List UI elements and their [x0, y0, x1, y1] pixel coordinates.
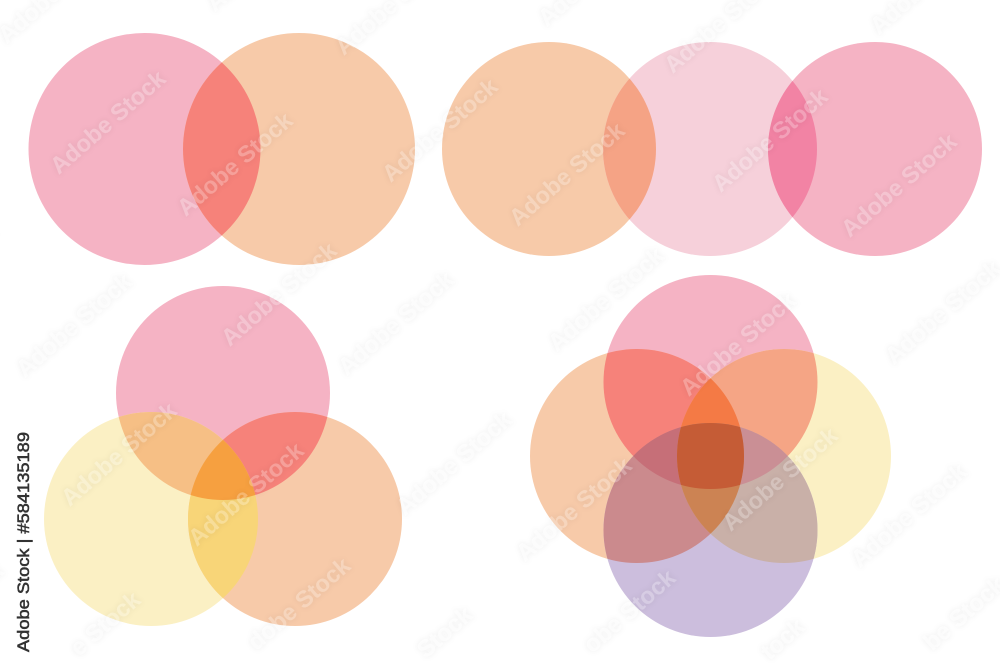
overlap: centre of all three — [190, 440, 256, 500]
overlap: yellow and orange — [188, 440, 258, 598]
circle: orange — [442, 42, 656, 256]
overlap: pink and orange — [190, 412, 328, 495]
circle: pink — [28, 33, 260, 265]
overlap: orange, yellow and purple — [677, 423, 744, 534]
overlap: pink and yellow — [681, 349, 818, 456]
watermark: repeated stock text: Adobe Stock — [216, 236, 342, 351]
watermark: repeated stock text: Adobe Stock — [391, 405, 517, 520]
overlap: orange and light pink — [603, 78, 656, 220]
watermark: repeated stock text: Adobe Stock — [56, 396, 182, 511]
watermark: repeated stock text: obe Stock — [578, 564, 681, 657]
credit: vertical stock id: Adobe Stock | #584135189 — [14, 432, 33, 652]
overlap: pink and orange — [183, 62, 260, 236]
watermark: repeated stock text: Adobe Stock — [504, 116, 630, 231]
watermark: repeated stock text: Adobe Stock — [717, 421, 843, 536]
watermark: repeated stock text: Adobe Stock — [172, 106, 298, 221]
watermark: repeated stock text: Adobe Stock — [377, 72, 503, 187]
diagram: two circle venn — [28, 33, 415, 265]
watermark: repeated stock text: Adobe Stock — [333, 265, 459, 380]
diagram: four circle venn — [530, 275, 891, 637]
circle: pink — [116, 286, 330, 500]
circle: orange — [530, 349, 744, 563]
overlap: pink, orange and purple — [634, 427, 681, 485]
diagram: three circle venn — [44, 286, 402, 626]
circle: orange — [188, 412, 402, 626]
watermark: repeated stock text: dobe Stock — [243, 552, 356, 655]
overlap: yellow and purple — [681, 427, 818, 563]
overlap: light pink and pink — [768, 81, 817, 217]
diagram: three circle chain — [442, 42, 982, 256]
circle: yellow — [677, 349, 891, 563]
watermark: repeated stock text: e Stock — [65, 586, 146, 661]
overlap: pink, orange and yellow — [681, 378, 740, 427]
watermark: repeated stock text: Adobe Stock — [11, 267, 137, 382]
watermark: repeated stock text: Adobe Stock — [846, 457, 972, 572]
watermark: repeated stock text: Adobe Stock — [45, 64, 171, 179]
watermark: repeated stock text: Adobe Stock — [836, 127, 962, 242]
watermark: repeated stock text: Adobe Stock — [543, 241, 669, 356]
circle: yellow — [44, 412, 258, 626]
watermark: repeated stock text: Adobe Stock — [511, 451, 637, 566]
watermark: repeated stock text: Adobe Stock — [707, 82, 833, 197]
circle: purple — [604, 423, 818, 637]
watermark: repeated stock text: Stock — [412, 601, 478, 663]
circle: pink — [604, 275, 818, 489]
overlap: centre of all four — [677, 423, 744, 489]
overlap: pink and orange — [604, 349, 710, 456]
watermark: repeated stock text: tock — [756, 613, 810, 664]
circle: orange — [183, 33, 415, 265]
overlap: orange and purple — [604, 427, 710, 563]
circle: pink — [768, 42, 982, 256]
watermark: repeated stock text: Adobe Stock — [183, 436, 309, 551]
overlap: pink, yellow and purple — [684, 423, 788, 485]
circle: light pink — [603, 42, 817, 256]
overlap: pink and yellow — [118, 412, 223, 495]
watermark: repeated stock text: Adobe Stock — [675, 286, 801, 401]
